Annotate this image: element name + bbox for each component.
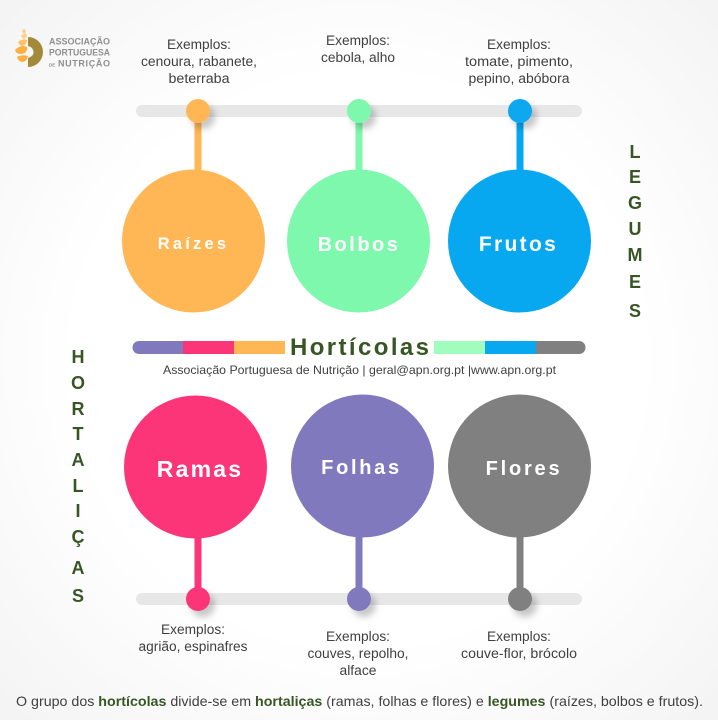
node: ramas — [124, 396, 267, 611]
node: raízes — [122, 99, 265, 312]
node: bolbos — [287, 99, 430, 312]
vertical heading: legumes: S — [629, 301, 641, 321]
vertical heading: hortaliças: I — [75, 501, 81, 521]
label: Raízes: Raízes — [158, 235, 229, 253]
node: folhas — [291, 394, 434, 611]
vertical heading: hortaliças: R — [72, 399, 84, 419]
top examples: bolbos: Exemplos: — [326, 33, 390, 48]
bottom examples: folhas: alface — [340, 663, 376, 678]
logo: Associação Portuguesa de Nutrição — [15, 29, 110, 68]
top examples: frutos: tomate, pimento, — [465, 54, 573, 69]
node: frutos — [448, 99, 591, 312]
label: Flores: Flores — [486, 458, 562, 480]
vertical heading: legumes: E — [629, 167, 641, 187]
bottom examples: flores: couve-flor, brócolo — [461, 646, 577, 661]
logo text — [49, 36, 110, 68]
top examples: frutos: Exemplos: — [487, 37, 551, 52]
vertical heading: hortaliças: A — [72, 558, 84, 578]
vertical heading: legumes: G — [628, 193, 642, 213]
bottom examples: folhas: Exemplos: — [326, 629, 390, 644]
title: Hortícolas — [290, 334, 429, 361]
top examples: raízes: cenoura, rabanete, — [141, 54, 257, 69]
bottom timeline bar — [136, 593, 582, 605]
logo text: DE — [49, 62, 55, 68]
vertical heading: hortaliças: T — [72, 424, 84, 444]
vertical heading: hortaliças: Ç — [72, 527, 84, 547]
vertical heading: hortaliças: L — [72, 476, 84, 496]
bottom examples: ramas: agrião, espinafres — [138, 639, 248, 654]
node: flores — [448, 394, 591, 611]
top examples: raízes: Exemplos: — [167, 37, 231, 52]
colour bar right — [434, 341, 586, 354]
label: Ramas: Ramas — [157, 456, 243, 482]
bottom examples: folhas: couves, repolho, — [308, 646, 408, 661]
bottom examples: ramas: Exemplos: — [161, 622, 225, 637]
vertical heading: hortaliças: S — [72, 586, 84, 606]
vertical heading: hortaliças: H — [72, 347, 84, 367]
vertical heading: legumes: E — [629, 272, 641, 292]
logo text: PORTUGUESA — [49, 48, 110, 58]
label: Folhas: Folhas — [321, 457, 402, 479]
icon: wheat and D mark — [15, 29, 43, 67]
vertical heading: hortaliças — [71, 347, 85, 606]
logo text: ASSOCIAÇÃO — [49, 36, 110, 46]
vertical heading: hortaliças: O — [71, 373, 85, 393]
top examples: bolbos: cebola, alho — [321, 50, 395, 65]
label: Bolbos: Bolbos — [318, 234, 400, 256]
vertical heading: hortaliças: A — [72, 450, 84, 470]
logo text: NUTRIÇÃO — [58, 58, 110, 68]
top timeline bar — [136, 105, 582, 117]
top examples: frutos: pepino, abóbora — [468, 71, 570, 86]
vertical heading: legumes: L — [630, 142, 640, 162]
vertical heading: legumes: U — [628, 219, 642, 239]
label: Frutos: Frutos — [479, 233, 558, 256]
footer sentence: O grupo dos hortícolas divide-se em hortaliças (ramas, folhas e flores) e legumes (raízes, bolbos e frutos). — [16, 693, 703, 709]
colour bar left — [133, 341, 285, 354]
bottom examples: flores: Exemplos: — [487, 629, 551, 644]
vertical heading: legumes: M — [628, 245, 642, 265]
top examples: raízes: beterraba — [168, 71, 230, 86]
vertical heading: legumes — [628, 142, 642, 321]
contact line: Associação Portuguesa de Nutrição | geral@apn.org.pt |www.apn.org.pt — [163, 363, 557, 377]
